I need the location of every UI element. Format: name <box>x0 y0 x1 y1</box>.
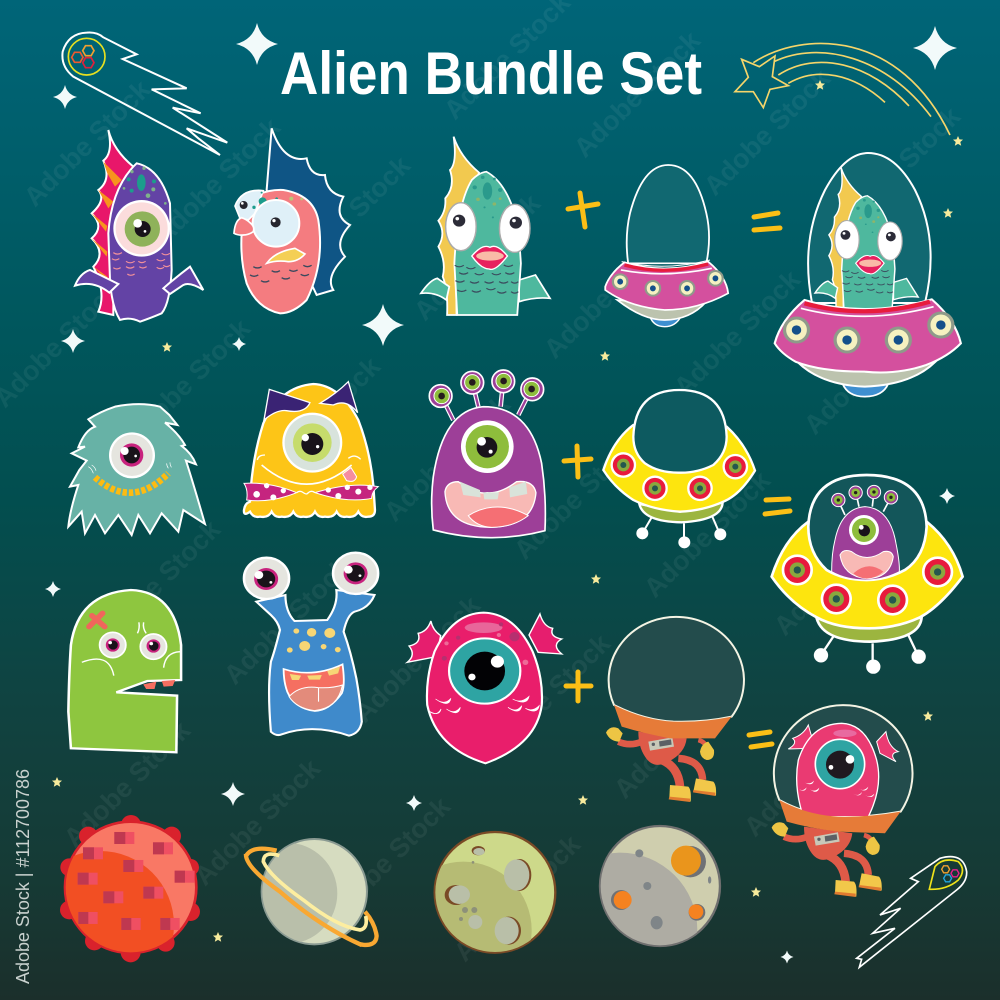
plus sign 2 <box>564 446 591 477</box>
watermark: Adobe Stock <box>218 552 357 690</box>
watermark: Adobe Stock <box>828 101 967 239</box>
alien: green monster <box>68 590 181 752</box>
alien: blue monster with eye stalks <box>244 553 378 736</box>
watermark: Adobe Stock <box>18 74 157 212</box>
watermark: Adobe Stock <box>348 590 487 728</box>
watermark: Adobe Stock <box>798 302 937 440</box>
teal alien inside dome <box>815 168 918 310</box>
watermark: Adobe Stock <box>408 188 547 326</box>
watermark: Adobe Stock <box>638 465 777 603</box>
watermark: Adobe Stock <box>148 112 287 250</box>
watermark: Adobe Stock <box>538 226 677 364</box>
title: Alien Bundle Set <box>280 40 702 107</box>
icon: comet bottom right <box>857 857 967 967</box>
planet: green cratered <box>434 830 556 954</box>
watermark: Adobe Stock <box>698 63 837 201</box>
watermark: Adobe Stock <box>318 791 457 929</box>
ufo 2 with purple alien <box>772 475 963 673</box>
ufo 1 with teal alien <box>775 153 961 397</box>
equals sign 2 <box>765 499 790 514</box>
watermark: Adobe Stock <box>378 389 517 527</box>
alien: purple one-eyed fin alien <box>75 130 203 322</box>
watermark: Adobe Stock <box>88 514 227 652</box>
watermark: Adobe Stock <box>568 25 707 163</box>
watermark: Adobe Stock <box>248 351 387 489</box>
alien: purple monster with antennae <box>429 370 545 538</box>
alien: yellow monster with bow tie <box>244 382 378 517</box>
alien: pink round monster <box>407 613 562 763</box>
equals sign 1 <box>754 213 780 230</box>
watermark: Adobe Stock <box>738 704 877 842</box>
plus sign 3 <box>566 672 591 701</box>
watermark: Adobe Stock <box>608 666 747 804</box>
watermark: Adobe Stock <box>508 427 647 565</box>
alien: teal furry monster <box>68 404 205 535</box>
pink alien inside helmet <box>788 723 898 817</box>
watermark: Adobe Stock <box>58 715 197 853</box>
alien: coral fish alien <box>234 128 350 313</box>
watermark: Adobe Stock <box>768 503 907 641</box>
ufo 1: pink saucer <box>605 165 728 327</box>
astronaut with pink alien <box>772 705 913 897</box>
planet: ringed <box>236 839 377 945</box>
equals sign 3 <box>749 732 772 747</box>
watermark: Adobe Stock <box>668 264 807 402</box>
watermark: Adobe Stock <box>278 150 417 288</box>
planet: red spiky <box>60 815 200 962</box>
stock id label: Adobe Stock | #112700786 <box>13 769 33 984</box>
astronaut suit <box>606 617 744 802</box>
watermark: Adobe Stock <box>448 829 587 967</box>
watermark: Adobe Stock <box>478 628 617 766</box>
watermark: Adobe Stock <box>118 313 257 451</box>
purple alien inside dome <box>832 485 899 580</box>
planet: grey cratered <box>598 824 722 948</box>
icon: shooting star top right <box>735 43 950 135</box>
plus sign 1 <box>568 193 598 227</box>
ufo 2: yellow saucer <box>603 390 755 547</box>
watermark: Adobe Stock <box>188 753 327 891</box>
alien: teal fish alien <box>421 137 550 315</box>
icon: comet top left <box>62 33 227 155</box>
